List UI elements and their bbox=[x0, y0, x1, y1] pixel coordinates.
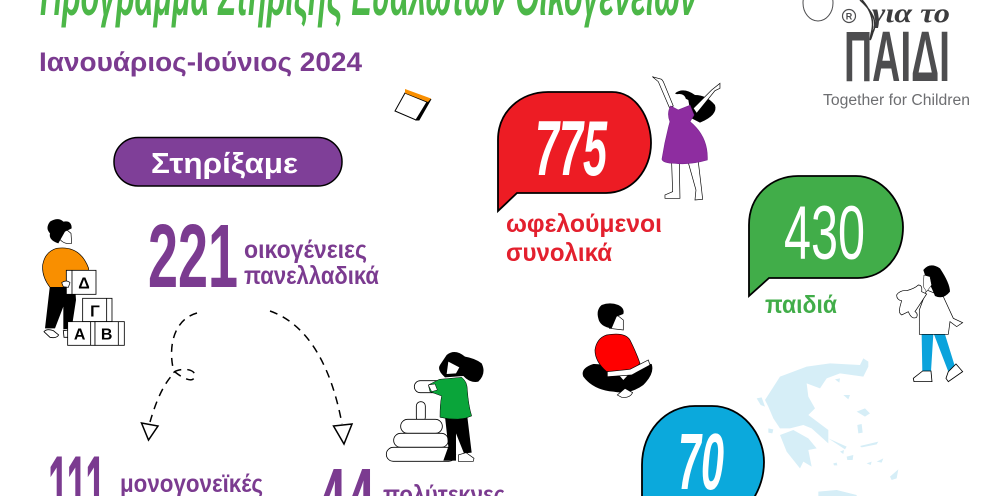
speech bubble: 775 beneficiaries bbox=[498, 92, 651, 211]
speech bubble: 70 bbox=[642, 406, 764, 496]
stat: 44 large families bbox=[318, 451, 505, 496]
dashed arrow: to large families bbox=[270, 311, 352, 444]
label: beneficiaries total: ωφελούμενοι bbox=[506, 210, 662, 238]
stat: 221 families: 221 bbox=[148, 207, 238, 307]
illustration: child with alphabet blocks: Β bbox=[101, 327, 112, 344]
logo: Μαζί για το Παιδί: R bbox=[846, 12, 853, 22]
label: beneficiaries total bbox=[506, 210, 662, 267]
illustration: child with alphabet blocks: Α bbox=[74, 327, 86, 344]
logo: Μαζί για το Παιδί: Together for Children bbox=[823, 92, 970, 109]
icon: tumbling block bbox=[395, 89, 431, 120]
illustration: child with alphabet blocks: Δ bbox=[78, 276, 90, 293]
subtitle: period: Ιανουάριος-Ιούνιος 2024 bbox=[39, 47, 362, 77]
stat: 221 families: πανελλαδικά bbox=[244, 262, 380, 290]
logo: Μαζί για το Παιδί bbox=[803, 0, 970, 109]
stat: 111 single-parent families bbox=[48, 436, 263, 496]
speech bubble: 430 children: 430 bbox=[784, 191, 865, 276]
map of Greece bbox=[757, 358, 898, 496]
speech bubble: 775 beneficiaries: 775 bbox=[535, 104, 608, 192]
dashed arrow: to single-parent families bbox=[142, 313, 197, 440]
heading button: Στηρίξαμε bbox=[114, 138, 342, 186]
speech bubble: 430 children bbox=[749, 176, 903, 296]
heading button: Στηρίξαμε: Στηρίξαμε bbox=[151, 148, 298, 180]
stat: 221 families: οικογένειες bbox=[244, 236, 367, 264]
illustration: girl with stacking rings bbox=[386, 352, 484, 461]
illustration: child with alphabet blocks bbox=[43, 219, 124, 345]
label: beneficiaries total: συνολικά bbox=[506, 239, 613, 267]
illustration: girl with teddy bear bbox=[897, 265, 963, 382]
illustration: child with alphabet blocks: Γ bbox=[90, 303, 100, 320]
label: children: παιδιά bbox=[765, 291, 838, 319]
illustration: girl in purple dress bbox=[652, 77, 720, 200]
stat: 221 families bbox=[148, 207, 380, 307]
illustration: boy reading cross-legged bbox=[583, 303, 652, 397]
